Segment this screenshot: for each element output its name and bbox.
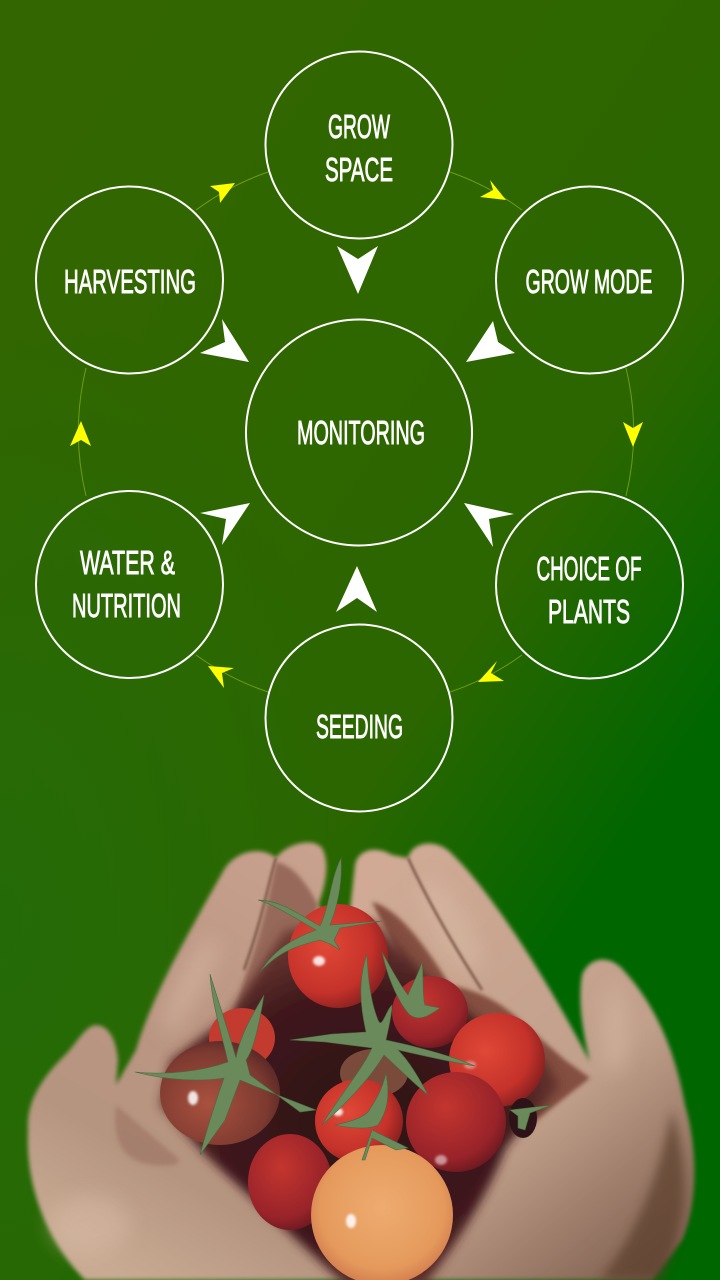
step: grow space: GROW [328, 108, 390, 145]
step: grow space [266, 52, 452, 238]
step: grow space: SPACE [325, 151, 393, 188]
step: harvesting [36, 186, 223, 374]
step: water and nutrition [36, 491, 223, 678]
step: grow mode [496, 186, 683, 374]
illustration: hands holding tomatoes [28, 842, 694, 1280]
cavity shadow [160, 920, 560, 1280]
step: water and nutrition: WATER & [80, 544, 175, 581]
step: seeding [266, 624, 452, 812]
tomato stems and sepals [135, 858, 552, 1160]
center: monitoring [246, 320, 472, 546]
white arrows to monitoring [200, 246, 515, 612]
yellow cycle arrows [70, 180, 643, 688]
finger gap lines [244, 858, 482, 990]
step: choice of plants: CHOICE OF [536, 550, 642, 587]
finger shadows [115, 862, 590, 1166]
left hand [28, 842, 400, 1280]
step: choice of plants: PLANTS [548, 593, 630, 630]
cycle ring arcs [78, 172, 634, 692]
skin highlights [50, 868, 627, 1255]
step: choice of plants [496, 492, 683, 678]
step: water and nutrition: NUTRITION [72, 587, 181, 624]
center: monitoring: MONITORING [297, 414, 425, 451]
tomatoes [160, 904, 545, 1280]
tomato highlights [188, 956, 476, 1228]
right thumb edge shadow [600, 1110, 684, 1280]
right hand [340, 843, 694, 1280]
step: seeding: SEEDING [316, 708, 403, 745]
step: harvesting: HARVESTING [64, 263, 196, 300]
